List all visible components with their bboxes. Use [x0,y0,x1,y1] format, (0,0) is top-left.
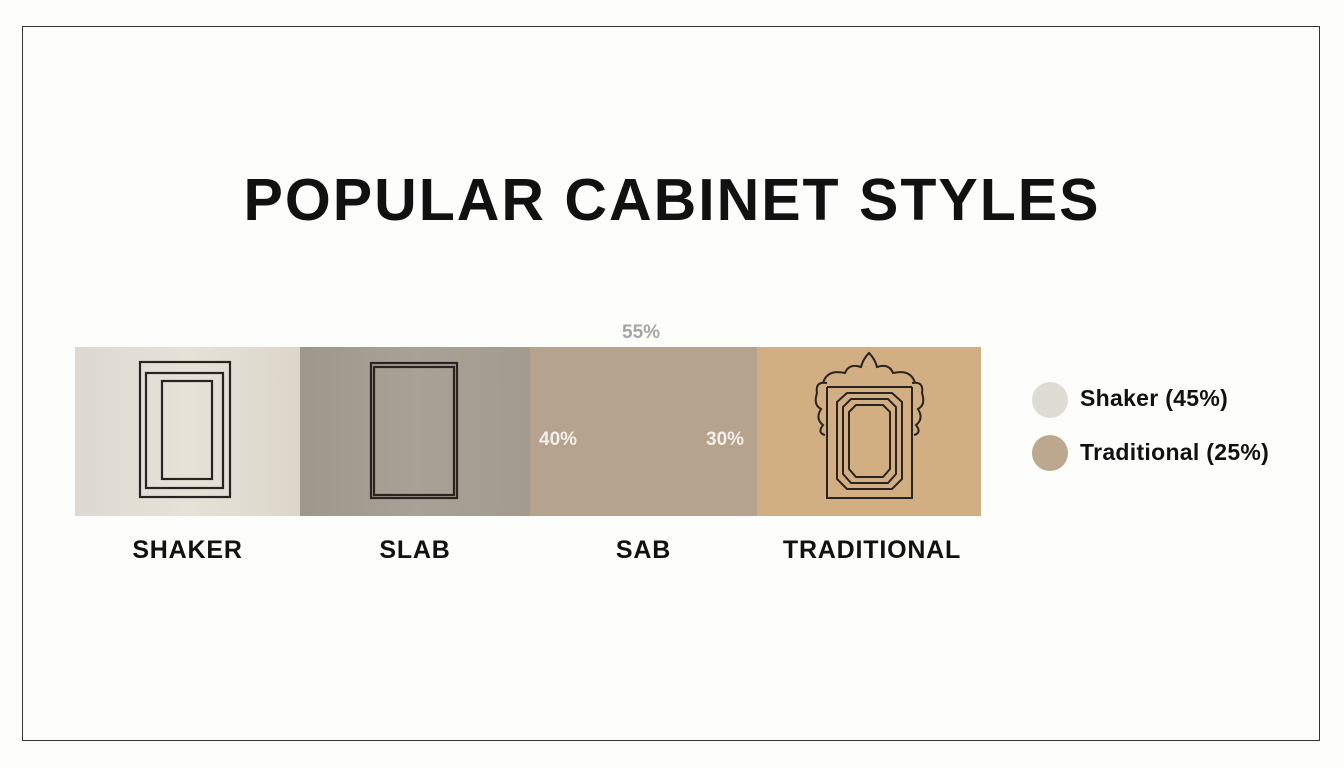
label: 40%: 40% [539,429,577,450]
legend item: traditional [1032,435,1269,471]
label: 30%: 30% [706,429,744,450]
text: SAB [616,536,671,564]
text: TRADITIONAL [783,536,961,564]
text: SHAKER [132,536,243,564]
legend item: shaker: Shaker (45%) [1080,385,1228,411]
icon: shaker door [138,360,232,498]
labels: categories [132,536,961,564]
legend item: traditional: Traditional (25%) [1080,439,1269,465]
legend item: shaker [1032,382,1228,418]
title: POPULAR CABINET STYLES [244,167,1100,233]
legend [1032,382,1269,471]
text: SLAB [379,536,451,564]
icon: slab door [370,362,458,500]
label: 55%: 55% [622,322,660,343]
panel: shaker [75,347,300,516]
panel: slab [300,347,530,516]
panel: traditional [757,347,981,516]
panel: sab [530,347,757,516]
icon: traditional door [814,352,924,499]
